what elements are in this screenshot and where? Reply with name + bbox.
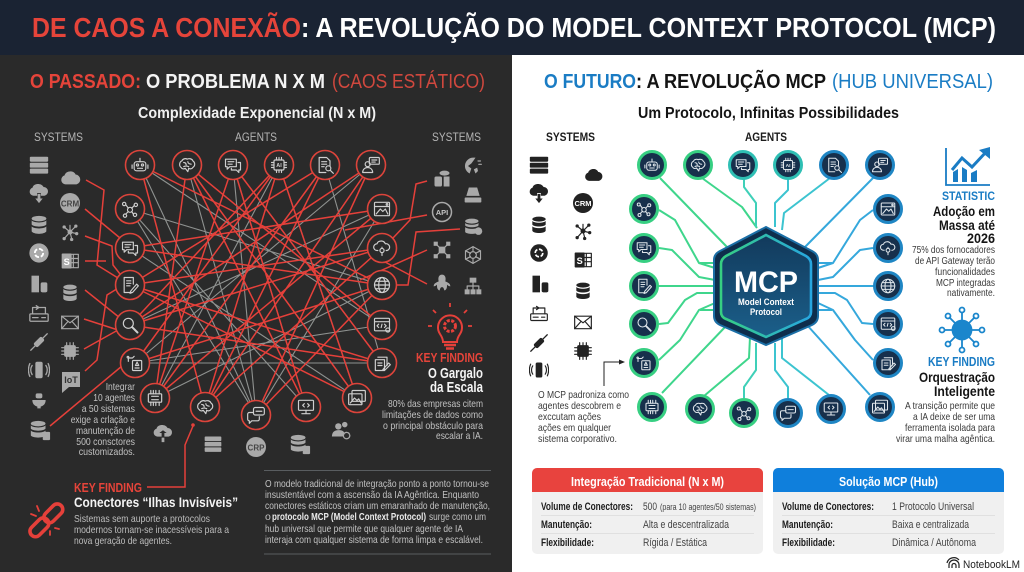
heading: past: O PROBLEMA N X M — [146, 71, 325, 93]
comparison table: MCP solution: Flexibilidade: — [782, 537, 835, 549]
text block: MCP standardizes: O MCP padroniza como — [538, 389, 629, 401]
text block: summary paragraph: hub universal que permite que qualquer agente de IA — [265, 523, 463, 535]
agent: pictures — [342, 384, 372, 412]
comparison table: traditional integration: Rígida / Estática — [643, 537, 708, 549]
comparison table: MCP solution: Dinâmica / Autônoma — [892, 537, 977, 549]
agent: globe — [874, 272, 902, 300]
comparison table: traditional integration: Integração Tradicional (N x M) — [571, 474, 724, 489]
subheading: one protocol: Um Protocolo, Infinitas Possibilidades — [638, 105, 899, 122]
agent: chat — [218, 150, 248, 180]
text block: MCP standardizes: ações em qualquer — [538, 422, 611, 434]
arrow: key finding to agent — [147, 423, 195, 487]
comparison table: traditional integration — [532, 468, 763, 554]
heading: future — [544, 70, 993, 93]
agent: document pen — [116, 270, 144, 300]
heading: future: : A REVOLUÇÃO MCP — [636, 70, 826, 93]
agent: code window — [368, 310, 396, 340]
system icons: dark panel: CRM — [61, 200, 79, 208]
agent: code chat — [774, 400, 802, 426]
column labels: AGENTS — [745, 130, 787, 144]
text block: MCP standardizes: exccutam ações — [538, 411, 601, 423]
NotebookLM watermark: NotebookLM — [963, 559, 1020, 571]
comparison table: traditional integration: Manutenção: — [541, 519, 592, 531]
key finding: smart orchestration: A transição permite que — [905, 400, 995, 412]
column labels — [34, 130, 481, 144]
agent: AI chip — [774, 152, 802, 178]
key finding: scale bottleneck — [382, 351, 484, 442]
agent: monitor — [818, 396, 844, 422]
agent: chip — [638, 394, 666, 420]
key finding: smart orchestration: KEY FINDING — [928, 355, 995, 369]
panel: past (dark) — [0, 55, 512, 572]
icon: growth chart — [946, 147, 990, 185]
agent: image — [874, 196, 902, 222]
key finding: smart orchestration: ferramenta isolada para — [905, 422, 995, 434]
agent: image — [368, 194, 396, 224]
text block: MCP standardizes — [538, 389, 629, 445]
text block: summary paragraph: conectores estáticos criam um emaranhado de manutenção, — [265, 500, 490, 512]
statistic: mass adoption: STATISTIC — [942, 189, 995, 203]
text block: summary paragraph: o — [265, 511, 271, 523]
text block: MCP standardizes: sistema corporativo. — [538, 433, 617, 445]
agent: chat bubbles — [116, 234, 144, 262]
agent: user chat — [356, 150, 386, 180]
heading: future: O FUTURO — [544, 71, 636, 93]
key finding: invisible islands — [74, 481, 238, 547]
text block: integration cost: customizados. — [79, 446, 135, 458]
agent: nodes — [116, 194, 144, 224]
agent: document search — [820, 152, 848, 178]
agent: documents — [368, 348, 396, 378]
statistic: mass adoption: 75% dos fornocadores — [912, 245, 995, 256]
comparison table: MCP solution: Volume de Conectores: — [782, 501, 874, 513]
column labels — [546, 130, 787, 144]
key finding: smart orchestration: Orquestração — [919, 369, 995, 385]
system icons: dark panel: API — [436, 208, 448, 217]
heading: future: (HUB UNIVERSAL) — [832, 71, 993, 93]
icon: broken chain link — [28, 502, 65, 539]
text block: summary paragraph: insustentável com a ascensão da IA Agêntica. Enquanto — [265, 489, 479, 501]
system icons: light panel: CRM — [574, 199, 592, 208]
agent: cloud gear — [368, 234, 396, 262]
agent: brain — [684, 152, 712, 178]
header band — [0, 0, 1024, 55]
text block: summary paragraph: interaja com qualquer sistema de forma limpa e escalável. — [265, 534, 483, 546]
agent: robot — [638, 152, 666, 178]
key finding: smart orchestration: a IA deixe de ser uma — [913, 411, 995, 423]
agent: id tag — [630, 350, 658, 376]
comparison table: traditional integration: Flexibilidade: — [541, 537, 594, 549]
agent: puzzle brain — [730, 400, 758, 426]
comparison table: traditional integration: 500 — [643, 501, 657, 513]
statistic: mass adoption: MCP integradas — [936, 278, 995, 289]
key finding: scale bottleneck: KEY FINDING — [416, 351, 483, 365]
icon: light bulb gear — [428, 303, 472, 348]
comparison table: traditional integration: (para 10 agentes/50 sistemas) — [660, 502, 756, 512]
agent: robot — [126, 150, 154, 180]
text block: summary paragraph: surge como um — [429, 511, 486, 523]
key finding: scale bottleneck: escalar a IA. — [436, 430, 483, 442]
key finding: smart orchestration: Inteligente — [934, 383, 995, 399]
MCP hub hexagon: Protocol — [750, 307, 782, 317]
text block: integration cost: Integrar — [106, 381, 135, 393]
statistic: mass adoption: Adoção em — [933, 203, 995, 219]
text block: integration cost: 10 agentes — [93, 392, 135, 404]
key finding: invisible islands: modernos tornam-se inacessíveis para a — [74, 524, 229, 536]
title: DE CAOS A CONEXÃO — [32, 12, 301, 43]
key finding: smart orchestration — [896, 355, 995, 445]
agent: pictures — [866, 394, 894, 420]
agent: head brain — [190, 392, 220, 422]
key finding: invisible islands: Sistemas sem auporte a protocolos — [74, 513, 210, 525]
comparison table: MCP solution: Solução MCP (Hub) — [839, 474, 938, 489]
agent: chat — [730, 152, 756, 178]
text block: MCP standardizes: agentes descobrem e — [538, 400, 621, 412]
heading: past — [30, 70, 485, 93]
text block: integration cost: manutenção de — [76, 425, 135, 437]
agent: AI chip — [264, 150, 294, 180]
agent: user chat — [866, 152, 894, 178]
agent: chat bubbles — [630, 234, 658, 262]
agent: document pen — [630, 272, 658, 300]
comparison table: MCP solution — [773, 468, 1004, 554]
NotebookLM watermark — [947, 558, 1020, 571]
statistic: mass adoption: funcionalidades — [935, 267, 995, 278]
statistic: mass adoption: nativamente. — [947, 288, 995, 299]
key finding: invisible islands: nova geração de agentes. — [74, 535, 172, 547]
MCP hub hexagon: MCP — [734, 266, 798, 299]
text block: integration cost: a 50 sistemas — [82, 403, 135, 415]
text block: integration cost: exige a crlação e — [71, 414, 135, 426]
key finding: scale bottleneck: da Escala — [430, 380, 484, 396]
system icons: dark panel — [28, 157, 482, 457]
agent: monitor — [292, 392, 320, 422]
key finding: smart orchestration: virar uma malha agêntica. — [896, 433, 995, 445]
heading: past: O PASSADO: — [30, 71, 141, 93]
agent: code window — [874, 310, 902, 338]
column labels: AGENTS — [235, 130, 277, 144]
statistic: mass adoption: 2026 — [967, 230, 995, 246]
hub connectors — [644, 177, 888, 398]
key finding: scale bottleneck: 80% das empresas citem — [388, 398, 483, 410]
outer system connectors — [50, 180, 460, 426]
tangled red connections — [130, 165, 382, 415]
comparison table: traditional integration: Volume de Conectores: — [541, 501, 633, 513]
key finding: scale bottleneck: O Gargalo — [428, 366, 483, 382]
key finding: scale bottleneck: o principal obstáculo para — [383, 420, 483, 432]
column labels: SYSTEMS — [432, 130, 481, 144]
system icons: dark panel: CRP — [248, 444, 265, 452]
text block: integration cost — [71, 381, 135, 458]
callout arrow — [604, 360, 625, 386]
tangled gray connections — [130, 165, 382, 415]
agent: documents — [874, 350, 902, 376]
agent: chip — [140, 384, 170, 412]
agent: document search — [310, 150, 340, 180]
MCP hub hexagon: Model Context — [738, 297, 794, 307]
agent: brain — [172, 150, 202, 180]
statistic: mass adoption — [912, 189, 995, 299]
agent: id tag — [120, 348, 150, 378]
agent: nodes — [630, 196, 658, 222]
subheading: exponential complexity: Complexidade Exponencial (N x M) — [138, 105, 376, 122]
column labels: SYSTEMS — [34, 130, 83, 144]
agent: search — [116, 310, 144, 340]
comparison table: traditional integration: Alta e descentralizada — [643, 519, 730, 531]
panel: future (light) — [512, 55, 1024, 572]
agent: globe — [368, 270, 396, 300]
text block: summary paragraph — [264, 470, 491, 554]
icon: orchestration network — [940, 308, 984, 352]
agent: head brain — [686, 396, 714, 422]
heading: past: (CAOS ESTÁTICO) — [332, 70, 485, 93]
key finding: invisible islands: KEY FINDING — [74, 481, 142, 495]
MCP hub hexagon — [714, 227, 818, 345]
agent: search — [630, 310, 658, 338]
agent nodes: light panel — [630, 152, 902, 426]
text block: summary paragraph: O modelo tradicional de integração ponto a ponto tornou-se — [265, 478, 489, 490]
agent nodes: dark panel — [116, 150, 396, 430]
system icons: dark panel: IoT — [64, 375, 78, 385]
comparison table: MCP solution: Manutenção: — [782, 519, 833, 531]
text block: summary paragraph: protocolo MCP (Model Context Protocol) — [272, 511, 426, 523]
comparison table: MCP solution: 1 Protocolo Universal — [892, 501, 974, 513]
text block: integration cost: 500 consctores — [76, 436, 135, 448]
agent: cloud gear — [874, 234, 902, 262]
statistic: mass adoption: de API Gateway terão — [915, 256, 995, 267]
agent: code chat — [242, 400, 270, 430]
column labels: SYSTEMS — [546, 130, 595, 144]
statistic: mass adoption: Massa até — [939, 217, 995, 233]
key finding: invisible islands: Conectores “Ilhas Invisíveis” — [74, 494, 238, 510]
system icons: light panel — [529, 157, 602, 378]
comparison table: MCP solution: Baixa e centralizada — [892, 519, 970, 531]
key finding: scale bottleneck: limitações de dados como — [382, 409, 483, 421]
